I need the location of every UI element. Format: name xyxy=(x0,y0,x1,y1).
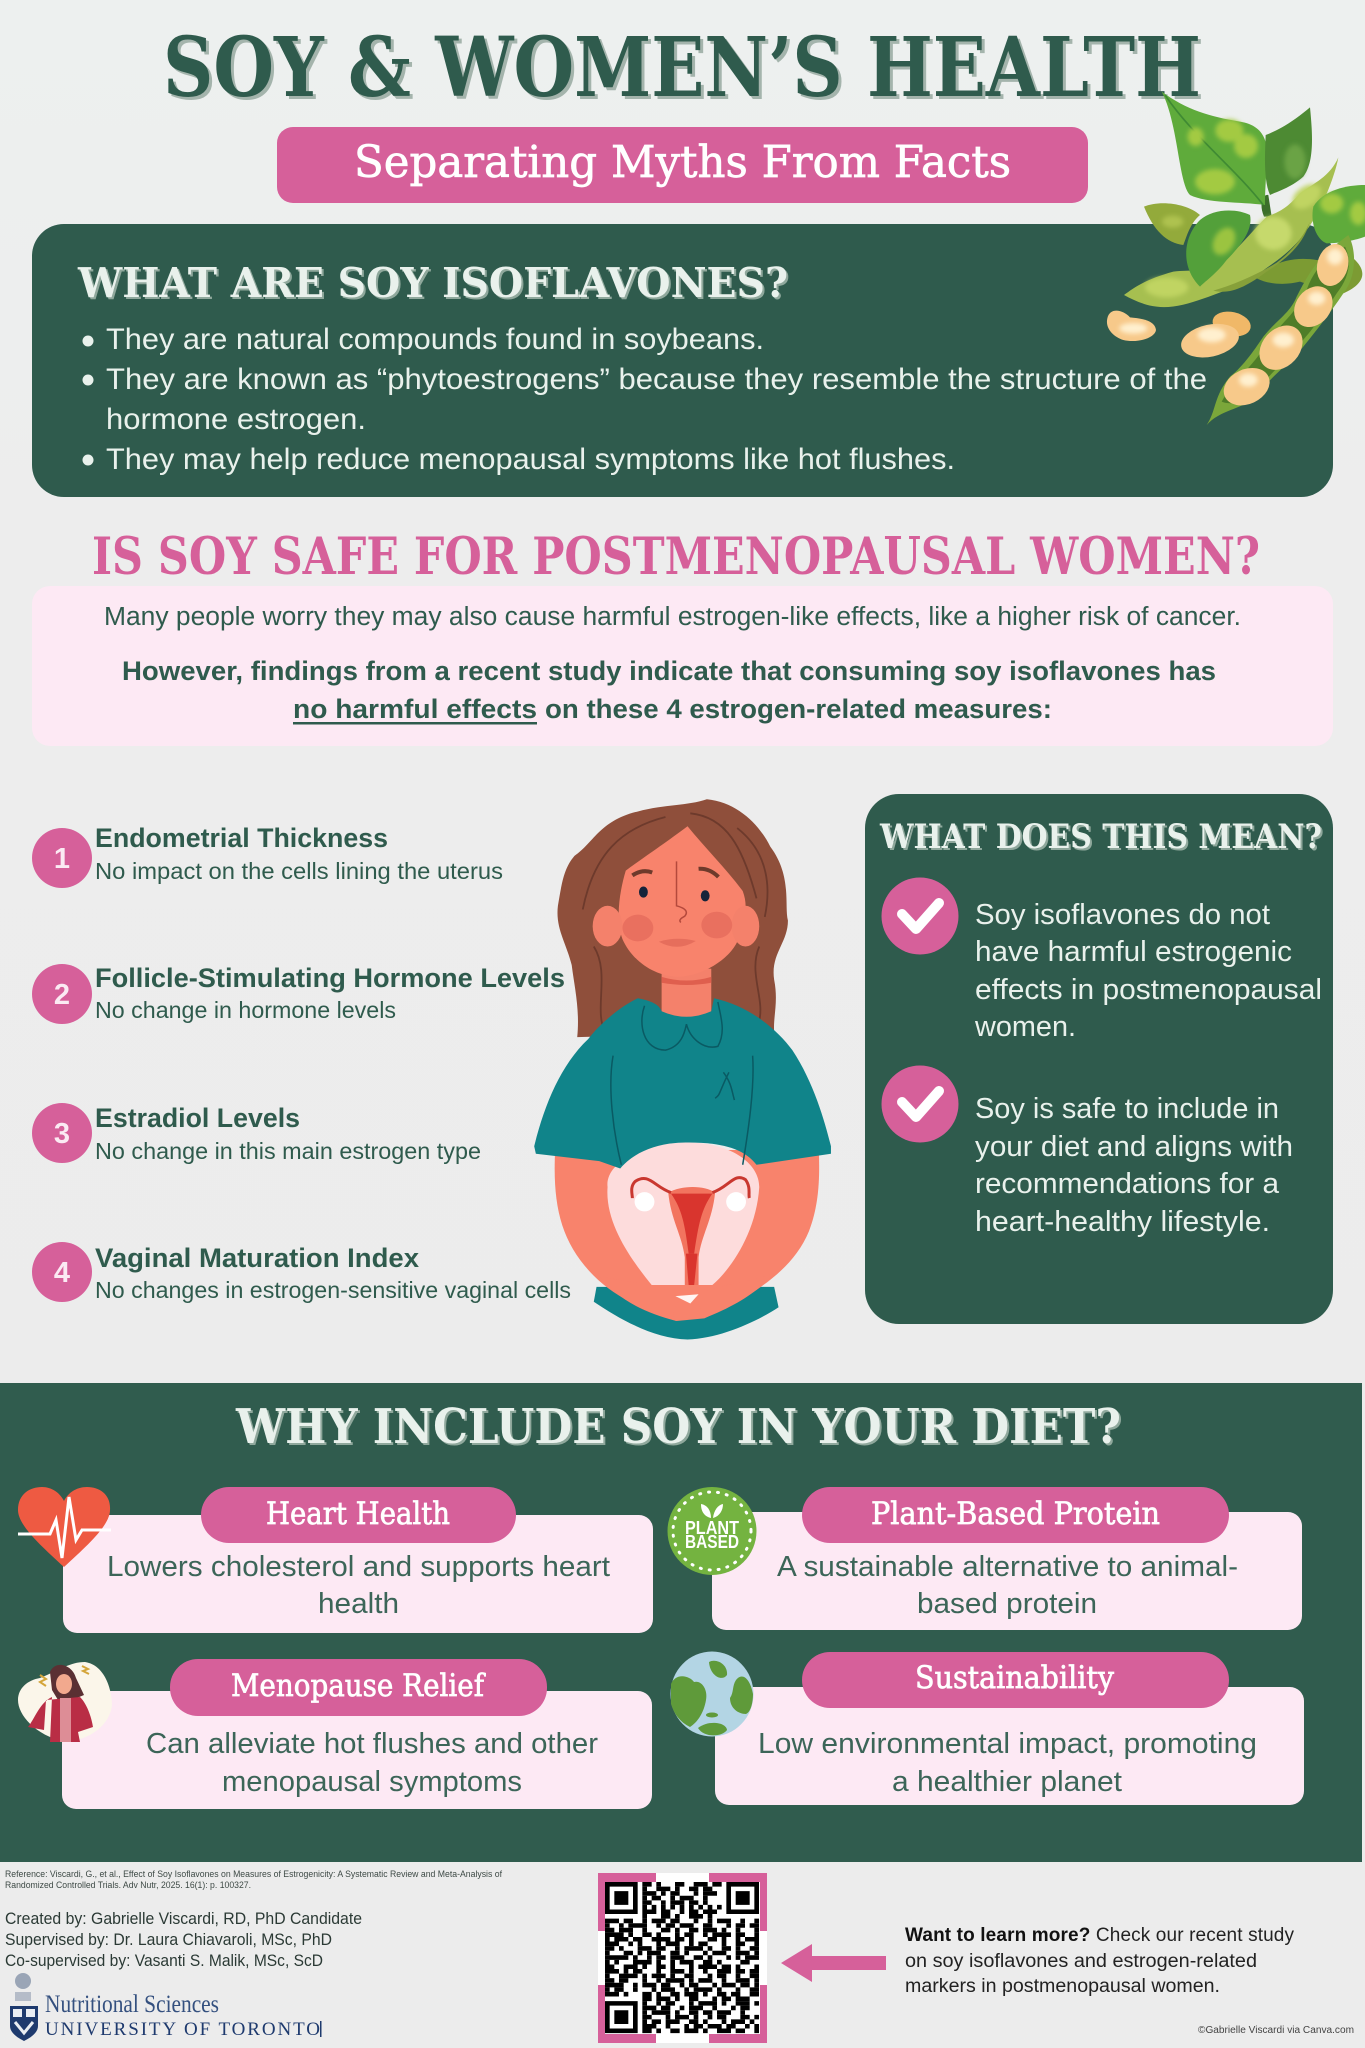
measure 2: 2 xyxy=(54,979,70,1011)
card: sustainability xyxy=(715,1652,1304,1805)
call to action text: Want to learn more? Check our recent study xyxy=(905,1925,1294,1946)
bullet list: They may help reduce menopausal symptoms like hot flushes. xyxy=(106,443,955,476)
list: estrogen-related measures xyxy=(32,823,571,1303)
bullet list: They are known as “phytoestrogens” because they resemble the structure of the xyxy=(106,363,1207,396)
bullet list: They are natural compounds found in soybeans. xyxy=(106,323,764,356)
text: safe to include xyxy=(975,1093,1293,1238)
measure 1: Endometrial Thickness xyxy=(95,823,388,853)
logo: university of toronto: Nutritional Sciences xyxy=(45,1991,219,2018)
reference citation xyxy=(5,1869,502,1890)
measure 4: Vaginal Maturation Index xyxy=(95,1243,419,1273)
heading: why include soy: WHY INCLUDE SOY IN YOUR DIET? xyxy=(235,1399,1121,1455)
call to action text: markers in postmenopausal women. xyxy=(905,1976,1220,1997)
card: plant-based protein: Plant-Based Protein xyxy=(871,1496,1160,1532)
measure 1: No impact on the cells lining the uterus xyxy=(95,858,503,884)
findings statement: no harmful effects xyxy=(293,694,537,724)
icon: plant based badge: PLANT xyxy=(685,1518,739,1538)
card: heart health: Lowers cholesterol and supports heart xyxy=(107,1551,610,1583)
text: safe to include: Soy is safe to include in xyxy=(975,1093,1279,1125)
card: sustainability: a healthier planet xyxy=(892,1766,1122,1798)
measure 2: Follicle-Stimulating Hormone Levels xyxy=(95,963,565,993)
text: no harmful effects: women. xyxy=(974,1011,1076,1043)
call to action text: on soy isoflavones and estrogen-related xyxy=(905,1951,1257,1972)
card: heart health: Heart Health xyxy=(266,1496,450,1532)
measure 2: No change in hormone levels xyxy=(95,997,396,1023)
credits xyxy=(5,1910,362,1970)
illustration: soybean plant xyxy=(1107,92,1365,425)
card: plant-based protein xyxy=(712,1487,1302,1630)
findings statement: However, findings from a recent study indicate that consuming soy isoflavones has xyxy=(122,656,1216,686)
findings statement xyxy=(122,656,1216,724)
logo: university of toronto xyxy=(10,1973,322,2041)
icon: globe xyxy=(670,1652,754,1736)
logo: university of toronto: UNIVERSITY OF TORONTO xyxy=(45,2019,320,2040)
credits: Created by: Gabrielle Viscardi, RD, PhD Candidate xyxy=(5,1910,362,1928)
panel: study findings xyxy=(32,586,1333,746)
icon: heart xyxy=(18,1487,111,1567)
measure 2 xyxy=(32,963,565,1024)
measure 4 xyxy=(32,1242,571,1303)
measure 3: No change in this main estrogen type xyxy=(95,1138,481,1164)
card: sustainability: Low environmental impact, promoting xyxy=(758,1728,1257,1760)
text: no harmful effects: Soy isoflavones do not xyxy=(975,899,1270,931)
icon: woman with hot flush xyxy=(18,1662,112,1742)
copyright: ©Gabrielle Viscardi via Canva.com xyxy=(1198,2025,1354,2036)
text: safe to include: your diet and aligns with xyxy=(975,1131,1293,1163)
icon: plant based badge xyxy=(668,1487,756,1575)
text: no harmful effects: have harmful estrogenic xyxy=(975,936,1292,968)
QR code xyxy=(598,1873,767,2043)
reference citation: Randomized Controlled Trials. Adv Nutr, 2025. 16(1): p. 100327. xyxy=(5,1880,251,1890)
card: menopause relief: Menopause Relief xyxy=(231,1668,486,1704)
reference citation: Reference: Viscardi, G., et al., Effect of Soy Isoflavones on Measures of Estrogenicity: A Systematic Review and Meta-Analysis of xyxy=(5,1869,502,1879)
measure 3: 3 xyxy=(54,1118,70,1150)
text: safe to include: heart-healthy lifestyle. xyxy=(975,1206,1270,1238)
measure 4: 4 xyxy=(54,1257,70,1289)
subtitle banner: Separating Myths From Facts xyxy=(354,137,1011,188)
icon: check mark 1 xyxy=(882,878,958,954)
measure 4: No changes in estrogen-sensitive vaginal cells xyxy=(95,1277,571,1303)
text: no harmful effects xyxy=(974,899,1322,1043)
panel: what does this mean xyxy=(865,794,1333,1324)
credits: Co-supervised by: Vasanti S. Malik, MSc, ScD xyxy=(5,1952,323,1970)
measure 3: Estradiol Levels xyxy=(95,1103,300,1133)
panel: what are soy isoflavones xyxy=(32,224,1333,497)
findings statement: on these 4 estrogen-related measures: xyxy=(545,694,1052,724)
illustration: woman with uterus xyxy=(534,799,831,1339)
card: sustainability: Sustainability xyxy=(915,1660,1114,1696)
worry statement: Many people worry they may also cause harmful estrogen-like effects, like a higher risk of cancer. xyxy=(104,603,1241,631)
text: safe to include: recommendations for a xyxy=(975,1168,1280,1200)
subtitle banner xyxy=(277,127,1088,203)
call to action text xyxy=(905,1925,1294,1997)
measure 1 xyxy=(32,823,503,888)
icon: plant based badge: BASED xyxy=(685,1532,739,1552)
icon: check mark 2 xyxy=(882,1066,958,1142)
card: heart health: health xyxy=(318,1588,399,1620)
measure 1: 1 xyxy=(54,843,70,875)
card: menopause relief: menopausal symptoms xyxy=(222,1766,522,1798)
heading: what are soy isoflavones: WHAT ARE SOY ISOFLAVONES? xyxy=(77,259,788,307)
card: heart health xyxy=(63,1487,653,1633)
credits: Supervised by: Dr. Laura Chiavaroli, MSc, PhD xyxy=(5,1931,332,1949)
measure 3 xyxy=(32,1103,481,1164)
bullet list: hormone estrogen. xyxy=(106,403,366,436)
title: SOY & WOMEN’S HEALTH xyxy=(163,20,1201,116)
arrow xyxy=(781,1944,886,1982)
card: menopause relief: Can alleviate hot flushes and other xyxy=(146,1728,598,1760)
card: menopause relief xyxy=(62,1659,652,1809)
bullet list xyxy=(82,323,1207,476)
card: plant-based protein: based protein xyxy=(917,1588,1097,1620)
panel: why include soy xyxy=(0,1383,1362,1862)
card: plant-based protein: A sustainable alternative to animal- xyxy=(777,1551,1238,1583)
text: no harmful effects: effects in postmenopausal xyxy=(975,974,1322,1006)
